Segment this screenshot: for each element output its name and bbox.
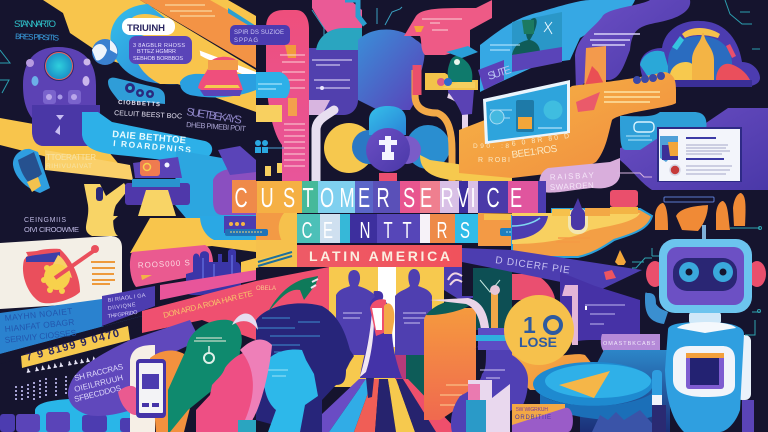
heading: Standard top-left text: STANNARTO (14, 19, 56, 30)
panel: icon cluster below lilac (552, 190, 638, 216)
label: purple notes: THFGPRIDO (107, 310, 139, 320)
text: orange panel caption: BEE1:ROS (511, 144, 558, 161)
panel: cyan swirl with title tag (110, 4, 200, 84)
pink head (196, 350, 263, 432)
icons: yellow tags (265, 163, 282, 176)
label: purple notes: DIIVIQNE (107, 302, 136, 312)
label: lilac label: OMASTBKCABS (603, 341, 655, 347)
illustration: dark city silhouette base (592, 410, 660, 432)
panel: top-left diagonal yellow band (43, 0, 256, 112)
title (232, 181, 546, 267)
illustration: phone (118, 359, 166, 418)
illustration: yellow hand (84, 183, 128, 236)
decorative connector lines (312, 7, 402, 36)
panel: cyan area and cube (175, 146, 256, 250)
text: orange panel caption: D90. :8 (473, 143, 509, 150)
heading: Standard top-left text (14, 19, 59, 43)
label: small purple card: SPIR DS SUZIOE (234, 30, 284, 36)
panel: right-going teal stripes (241, 258, 256, 276)
panel: red band with text (142, 250, 329, 360)
icon: small orange figure (615, 250, 626, 265)
panel: purple headline ribbon (462, 248, 642, 290)
illustration: gold coin (504, 295, 597, 411)
decorative circuit lines right (730, 226, 762, 335)
decorative circuit lines (632, 248, 660, 268)
label: orange tag below plate: ORDBITIIE (515, 415, 551, 421)
label: purple info card: SEBHOB BORBBOS (133, 56, 183, 62)
panel: pink button card: ROOS000 S (138, 258, 190, 270)
robot eye (44, 51, 74, 81)
icon: hexagonal product cube (13, 149, 50, 193)
label: yellow number strip (21, 326, 130, 375)
green head (168, 320, 242, 432)
shape: top pink panel (404, 0, 492, 55)
heading: Standard top-left text: BRES PIRSITIS (15, 32, 59, 43)
illustration: purple silhouettes (336, 269, 432, 400)
illustration: central monitor (125, 157, 190, 216)
panel: white document (657, 127, 742, 182)
label: yellow number strip: ♟ ♟♟♟♟♟ ♟♟♟♟♟ (25, 356, 97, 375)
icon: red pyramid card (584, 46, 606, 92)
panel: red band with text: DON ARD A ROIA HAR ETE (162, 289, 254, 320)
panel: band left of centers row (225, 213, 297, 267)
text block: dark band captions: SUE TBEKAYS (186, 106, 243, 127)
label: orange tag below plate (512, 404, 573, 432)
icons: small people (255, 140, 284, 153)
shape: top pink ribbon (312, 0, 365, 50)
panel: cyan pill band (82, 112, 212, 162)
avatar card (512, 12, 562, 72)
label: purple notes: BI RIAOL I GA (107, 293, 146, 304)
illustration: navy large head (256, 276, 354, 432)
label: yellow number strip: 7 9 8199 9 0470 (25, 327, 121, 364)
neck (689, 312, 721, 324)
title text: customer service: CUSTOMER SERVICE (235, 183, 522, 214)
text block: dark band captions (114, 100, 247, 133)
text block: left captions (24, 217, 79, 234)
panel: lower-left yellow band: RIHIVUAIVAT (46, 163, 92, 170)
label: small purple card (230, 25, 290, 45)
icons: orange figures (655, 193, 746, 231)
panel: blue base under plate (580, 350, 670, 432)
chart: red gauge with gear (23, 245, 115, 303)
panel: blue ribbon with text (0, 299, 142, 364)
subtitle band: Latin America: LATIN AMERICA (309, 248, 450, 264)
text block: left captions: OIVI CIROOWME (24, 225, 79, 234)
panel: lower-left yellow band: TTOERATTER (46, 153, 96, 162)
shape: large blue blob (358, 30, 424, 110)
panel: tray with bell (180, 57, 256, 97)
side arm (736, 335, 751, 400)
label: purple info card: 3 8AGBLR RHOSS (133, 43, 185, 49)
text block: dark band captions: CELUIT BEEST BOC (114, 110, 182, 121)
subtitle band: Latin America (297, 245, 462, 267)
label: purple notes (102, 286, 155, 326)
label: lilac callout: RAISBAY (550, 171, 595, 182)
illustration: blue robot (645, 225, 766, 432)
panel: pink data column (266, 10, 309, 181)
chart: rainbow walkway (303, 379, 459, 432)
label: purple info card (129, 36, 192, 64)
chips row (633, 72, 665, 84)
panel: blue ribbon with text: HIANFAT OBAGR (4, 317, 75, 334)
text: coin value: LOSE (519, 334, 557, 350)
illustration: orange panel with green cap (424, 298, 490, 420)
text: orange panel caption (473, 133, 570, 164)
panel: purple block with annotations (309, 48, 358, 115)
text: orange panel caption: R ROBI (478, 157, 510, 164)
platform with teal bell (425, 46, 478, 115)
illustration: plate with pie slice (533, 362, 662, 420)
panel: blue ribbon with text: SERIVIY CIOSSES (4, 327, 77, 345)
illustration: central walking figure (360, 291, 402, 398)
panel: band right of centers row (478, 181, 552, 246)
panel: backdrop central yellow (329, 267, 444, 387)
label: small purple card: SPPAG (234, 38, 258, 44)
panel: cream chart card (0, 236, 122, 309)
icon: purple circle with figure (366, 128, 421, 172)
panel: cyan pill band: I ROARDPNISS (113, 138, 192, 155)
chart: small dot grid (16, 374, 66, 400)
icon: cyan cross mark (160, 286, 172, 295)
body (665, 322, 744, 432)
panel: blue tablet (483, 80, 570, 144)
label: orange tag below plate: 5W WIGRKUH (516, 407, 548, 413)
text: coin value: 1 (523, 312, 536, 338)
panel: purple doc with lines (560, 272, 640, 345)
shape: teal dome (316, 28, 362, 50)
label: purple info card: BTTEZ HGMRR (137, 49, 176, 55)
illustration: purple figure group (451, 328, 512, 432)
circle: right blue (406, 125, 450, 169)
pipe: white curved connector (316, 110, 334, 181)
panel: pink button card (130, 245, 213, 287)
panel: top right cyan with person: SUTE (486, 64, 513, 83)
tag: Triumph: TRIUINH (127, 23, 165, 34)
illustration: dome cloud (638, 21, 760, 87)
head frame (659, 239, 752, 313)
text block: dark band captions: DHEB PIMEBI POIT (186, 120, 247, 133)
panel: cyan pill band: DAIE BETHTOE (112, 129, 186, 146)
panel: purple text bubble (68, 320, 200, 416)
panel: lower-left yellow band (0, 118, 133, 180)
decorative dots lines top right (725, 0, 760, 49)
text block: dark band captions: CIOBBETTS (118, 100, 160, 108)
text: orange panel caption: 6 0 8R 80 D (511, 133, 570, 148)
panel: top band behind left lower (90, 216, 256, 253)
icon: globe (92, 39, 118, 65)
label: lilac label (601, 334, 660, 353)
legs (652, 405, 666, 432)
illustration: bottom-left bars (0, 385, 137, 432)
panel: purple cloud upper right (575, 0, 690, 92)
panel: purple text bubble: OIEILRRUUH (73, 373, 124, 394)
chart: blue hand bar chart (185, 249, 241, 295)
panel: yellow blob below lilac callout (512, 208, 652, 257)
text: coin value (519, 312, 561, 350)
left ear (646, 261, 664, 287)
circle: yellow (324, 123, 374, 173)
panel: dark band card with dots (108, 78, 165, 104)
panel: yellow pale block under title (420, 155, 512, 181)
title text: centers: CENTTRS (302, 218, 470, 244)
panel: purple text bubble: SH RACCRAS (73, 362, 124, 383)
label: lilac callout (539, 158, 620, 193)
panel: cyan box (620, 112, 706, 150)
chest panel (673, 346, 735, 397)
panel: cyan note at left of column (256, 72, 290, 122)
panel: dark ribbon behind right (444, 267, 555, 330)
panel: top right cyan with person (478, 0, 635, 92)
illustration: purple robot (23, 47, 100, 146)
eyes (679, 262, 699, 282)
raised arm (645, 292, 668, 324)
illustration: left heads (130, 314, 272, 432)
pipe: orange elbow (415, 65, 465, 181)
right ear (748, 261, 766, 287)
illustration: cyan head (264, 350, 318, 432)
icon: network arrows (0, 50, 10, 93)
panel: purple text bubble: SFBECDDOS (73, 384, 122, 404)
label: lilac callout: SWAROEN (550, 181, 594, 192)
panel: red band with text: OBELA (256, 286, 276, 292)
panel: purple right backdrop (620, 108, 768, 190)
circle: blue left (352, 130, 386, 164)
shape: cyan cap (369, 106, 406, 135)
panel: blue ribbon with text: MAYHN NOAIET (4, 306, 73, 323)
panel: purple headline ribbon: D DICERF PIE (495, 255, 571, 276)
text block: left captions: CEINGMIIS (24, 217, 66, 224)
panel: orange ribbon (459, 72, 676, 178)
title row: centers tiles (297, 214, 478, 243)
title row: customer service tiles (232, 181, 546, 213)
antenna (702, 225, 706, 240)
